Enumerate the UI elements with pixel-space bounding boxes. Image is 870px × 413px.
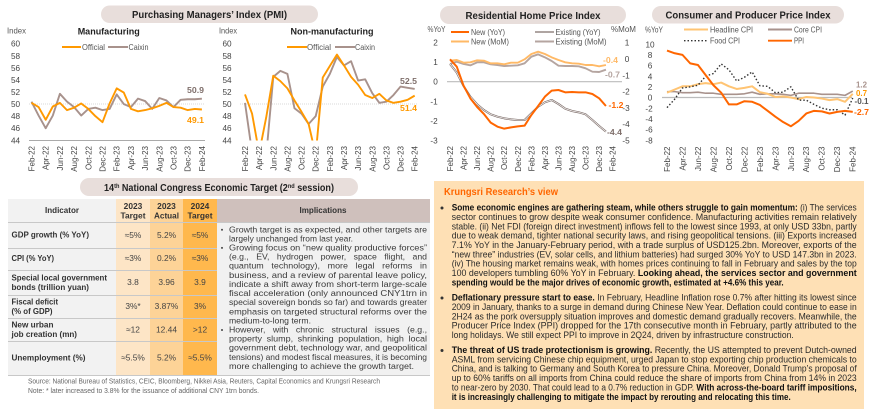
source note: Source: National Bureau of Statistics, CEIC, Bloomberg, Nikkei Asia, Reuters, Capital Economics and Krungsri Research — [28, 378, 380, 386]
chart: non-manufacturing PMI: 58 — [222, 52, 232, 61]
paragraph: US trade protectionism: to near-zero by 2030. That could lead to a 0.7% reduction in GDP. With across-the-board tariff impositions, — [452, 382, 857, 392]
chart: consumer and producer prices: Aug-22 — [709, 146, 718, 172]
chart: consumer and producer prices: Feb-23 — [756, 146, 765, 172]
chart: residential home prices: -3 — [622, 104, 630, 113]
chart: non-manufacturing PMI: Oct-23 — [382, 145, 391, 170]
table row: special local government bonds: 3.9 — [194, 277, 206, 287]
paragraph: deflationary pressure: long holidays. We still expect PPI to improve in 2Q24, driven by infrastructure construction. — [452, 330, 794, 340]
panel: Krungsri Research's view — [434, 181, 864, 409]
table row: special local government bonds: Special local government — [12, 272, 107, 282]
paragraph: economic engines: 7.1% YoY in the January-February period, with a trade surplus of USD125.2bn. Moreover, exports of the — [452, 240, 857, 250]
paragraph: deflationary pressure — [440, 292, 857, 340]
table row: special local government bonds — [12, 272, 206, 292]
chart: manufacturing PMI: Jun-23 — [141, 145, 150, 170]
chart: manufacturing PMI: Index — [7, 26, 26, 36]
chart: manufacturing PMI: 49.1 — [187, 115, 204, 125]
table cell: implications list: Growth target is as expected, and other targets are — [229, 224, 427, 234]
table row: unemployment: ≈5.5% — [188, 352, 212, 362]
chart: manufacturing PMI: Feb-22 — [28, 145, 36, 171]
chart: consumer and producer prices: Food CPI — [710, 37, 740, 46]
chart: consumer and producer prices — [645, 26, 869, 172]
chart: residential home prices: -1 — [430, 97, 438, 106]
chart: manufacturing PMI: 60 — [11, 40, 20, 49]
chart: non-manufacturing PMI: 54 — [222, 76, 232, 85]
source note: Note: * later increased to 3.8% for the issuance of additional CNY 1trn bonds. — [28, 388, 259, 395]
table row: GDP growth: 5.2% — [157, 230, 177, 240]
table header row: Indicator — [45, 205, 80, 215]
chart: residential home prices: Aug-22 — [487, 145, 496, 172]
table header row: Target — [188, 210, 213, 220]
chart: non-manufacturing PMI: Oct-22 — [298, 145, 307, 170]
chart: consumer and producer prices: Apr-22 — [678, 146, 688, 171]
table row: new urban job creation — [11, 320, 207, 339]
chart: non-manufacturing PMI: Jun-22 — [269, 145, 278, 170]
chart: residential home prices — [428, 25, 636, 172]
paragraph: US trade protectionism: The threat of US trade protectionism is growing. Recently, the US attempted to prevent Dutch-owned — [452, 345, 857, 355]
paragraph: US trade protectionism: it is increasingly challenging to mitigate the impact by rerouting and relocating this time. — [452, 392, 791, 402]
chart: residential home prices: -2 — [622, 88, 630, 96]
table row: unemployment — [12, 352, 212, 362]
chart: consumer and producer prices: -6 — [645, 126, 653, 135]
table row: GDP growth: GDP growth (% YoY) — [12, 230, 89, 240]
heading: National Congress economic target: 14 — [104, 182, 116, 194]
chart: residential home prices: %YoY — [428, 25, 446, 34]
table: economic targets — [8, 199, 430, 376]
chart: residential home prices: Jun-22 — [473, 145, 482, 170]
chart: manufacturing PMI: Apr-23 — [127, 145, 136, 170]
chart: consumer and producer prices: Dec-23 — [833, 146, 842, 172]
chart: consumer and producer prices: Dec-22 — [740, 146, 749, 172]
chart: residential home prices: New (YoY) — [471, 28, 505, 37]
table row: CPI: 0.2% — [157, 253, 177, 263]
table row: fiscal deficit: Fiscal deficit — [12, 296, 58, 306]
chart: consumer and producer prices: 0.7 — [856, 88, 867, 98]
chart: residential home prices: 0 — [625, 55, 630, 64]
chart: manufacturing PMI: 46 — [11, 124, 20, 133]
chart: consumer and producer prices: -8 — [645, 136, 653, 145]
table header row: 2023 — [124, 201, 143, 211]
chart: manufacturing PMI: 50 — [11, 100, 20, 109]
chart: residential home prices: -1 — [622, 71, 630, 80]
chart: manufacturing PMI: 58 — [11, 52, 20, 61]
paragraph: economic engines — [440, 202, 857, 288]
chart: residential home prices: Feb-23 — [527, 145, 536, 171]
chart: non-manufacturing PMI: 52 — [222, 88, 232, 97]
paragraph: US trade protectionism: China, and is talking to Germany and South Korea to pressure China. Moreover, Donald Trump’s proposal of — [452, 364, 857, 374]
chart: non-manufacturing PMI — [220, 28, 418, 172]
chart: consumer and producer prices: Headline CPI — [710, 26, 753, 34]
chart: residential home prices: -3 — [430, 136, 438, 145]
table row: special local government bonds: bonds (trillion yuan) — [12, 282, 89, 292]
table header row — [45, 201, 347, 220]
table row: unemployment: ≈5.5% — [121, 352, 145, 362]
table row: new urban job creation: ≈12 — [126, 324, 140, 334]
paragraph: US trade protectionism: ASML from servicing Chinese chip equipment, urged Japan to stop exporting chip production chemicals to — [452, 354, 857, 364]
chart: residential home prices: Dec-22 — [514, 145, 523, 172]
paragraph: economic engines: stable. (ii) Net FDI (foreign direct investment) inflows fell to the lowest since 1993, at only USD 33bn, partly — [452, 221, 857, 231]
table row: unemployment: 5.2% — [157, 352, 177, 362]
chart: non-manufacturing PMI: Dec-23 — [396, 145, 406, 172]
table header row: Implications — [300, 205, 347, 215]
chart: consumer and producer prices: -4 — [645, 115, 653, 124]
chart: non-manufacturing PMI: Dec-22 — [312, 145, 321, 172]
paragraph: economic engines: Some economic engines are gathering steam, while others struggle to gain momentum: (i) The services — [452, 202, 857, 212]
table row: CPI: CPI (% YoY) — [12, 253, 54, 263]
table cell: implications list: special sovereign bonds so far) and towards greater — [229, 297, 427, 307]
paragraph: US trade protectionism — [440, 345, 857, 402]
table cell: implications list: (e.g., EV, hydrogen power, space flight, and — [229, 252, 427, 262]
chart: non-manufacturing PMI: 46 — [222, 124, 232, 133]
paragraph: economic engines: sector continues to grow despite weak consumer confidence. Manufacturing activities remain relatively — [452, 212, 857, 222]
chart: residential home prices: Feb-24 — [609, 145, 618, 171]
chart: consumer and producer prices: Jun-22 — [694, 146, 703, 171]
paragraph: economic engines: 100 developers tumbling 60% YoY in February. Looking ahead, the services sector and government — [452, 268, 857, 278]
chart: manufacturing PMI: 50.9 — [187, 85, 204, 95]
chart: non-manufacturing PMI: 50 — [222, 100, 232, 109]
chart: manufacturing PMI: Feb-24 — [198, 145, 207, 171]
paragraph: economic engines: “new three” industries (EV, solar cells, and lithium batteries) had surged 30% YoY to USD 147.3bn in 2023. — [452, 249, 857, 259]
chart: consumer and producer prices: -2 — [645, 104, 653, 113]
chart: consumer and producer prices: Oct-22 — [725, 146, 734, 171]
chart: consumer and producer prices: -0.1 — [854, 96, 869, 106]
table cell: implications list: business, and a review of parental leave policy, — [229, 270, 427, 280]
chart: non-manufacturing PMI: Apr-22 — [255, 145, 264, 170]
chart: residential home prices: Oct-23 — [582, 145, 591, 170]
table row: new urban job creation: New urban — [12, 320, 54, 330]
chart: consumer and producer prices: -2.7 — [854, 107, 869, 117]
table cell: implications list: fiscal acceleration (only announced CNY1trn in — [229, 288, 427, 298]
heading: National Congress economic target: National Congress Economic Target (2 — [119, 182, 288, 194]
chart: residential home prices: 1 — [433, 58, 438, 67]
chart: manufacturing PMI: 56 — [11, 64, 20, 73]
chart: non-manufacturing PMI: Caixin — [355, 43, 375, 52]
table cell: implications list: tensions) and modest fiscal measures, it is becoming — [229, 352, 427, 362]
chart: manufacturing PMI: Dec-22 — [98, 145, 108, 172]
chart: manufacturing PMI: Aug-22 — [70, 145, 79, 172]
chart: consumer and producer prices: %YoY — [645, 26, 664, 34]
chart: consumer and producer prices: 0 — [648, 94, 653, 103]
table cell: implications list: quantum technology), more legal reforms in — [229, 261, 427, 271]
chart: residential home prices: Feb-22 — [446, 145, 455, 171]
chart: non-manufacturing PMI: 51.4 — [400, 103, 417, 113]
chart: residential home prices: Apr-22 — [460, 145, 469, 170]
chart: non-manufacturing PMI: Feb-24 — [411, 145, 420, 171]
chart: manufacturing PMI: Jun-22 — [56, 145, 65, 170]
chart: non-manufacturing PMI: Index — [219, 26, 237, 36]
chart: non-manufacturing PMI: Jun-23 — [354, 145, 363, 170]
table cell: implications list: largely unchanged from last year. — [229, 233, 353, 243]
paragraph: economic engines: spending would be the major drives of economic growth, estimated at +4.6% this year. — [452, 278, 784, 288]
chart: consumer and producer prices: Jun-23 — [787, 146, 796, 171]
heading: National Congress economic target: nd — [288, 183, 295, 190]
chart: residential home prices: Existing (YoY) — [556, 28, 601, 37]
chart: non-manufacturing PMI: Aug-22 — [283, 145, 292, 172]
table header row: 2023 — [157, 201, 176, 211]
paragraph: economic engines: (iv) The housing market remains weak, with homes prices continuing to fall in February and sales by the top — [452, 259, 857, 269]
table row: fiscal deficit: 3% — [194, 301, 207, 311]
paragraph: US trade protectionism: up to 60% tariffs on all imports from China could reduce the share of imports from China from 14% in 2023 — [452, 373, 857, 383]
chart: manufacturing PMI: Feb-23 — [113, 145, 122, 171]
chart: consumer and producer prices: 8 — [648, 51, 653, 60]
heading: Residential Home Price Index: Residential Home Price Index — [466, 10, 601, 22]
chart: residential home prices: Aug-23 — [568, 145, 577, 172]
chart: residential home prices: 1 — [625, 39, 630, 48]
table row: CPI: ≈3% — [192, 253, 209, 263]
chart: manufacturing PMI — [7, 26, 207, 172]
table row: new urban job creation: 12.44 — [156, 324, 177, 334]
paragraph: deflationary pressure: 2009 in January, thanks to a surge in demand during Chinese New Year. Deflation could continue to ease in — [452, 302, 857, 312]
chart: consumer and producer prices: 1.2 — [856, 80, 867, 90]
chart: non-manufacturing PMI: 44 — [222, 136, 232, 145]
chart: residential home prices: Existing (MoM) — [556, 38, 607, 46]
chart: residential home prices: 0 — [433, 78, 438, 87]
chart: non-manufacturing PMI: 52.5 — [400, 76, 417, 86]
chart: residential home prices: %MoM — [611, 25, 636, 34]
chart: manufacturing PMI: Oct-22 — [84, 145, 93, 170]
panel heading: Krungsri Research’s view — [444, 187, 558, 198]
chart: manufacturing PMI: Aug-23 — [155, 145, 164, 172]
table cell: implications list: However, with chronic structural issues (e.g., — [229, 324, 427, 334]
chart: manufacturing PMI: 52 — [11, 88, 20, 97]
heading: National Congress economic target — [80, 178, 358, 196]
chart: residential home prices: -4 — [622, 120, 630, 129]
chart: manufacturing PMI: Caixin — [128, 43, 148, 52]
chart: non-manufacturing PMI: Apr-23 — [340, 145, 349, 170]
chart: consumer and producer prices: Apr-23 — [771, 146, 780, 171]
table header row: 2024 — [191, 201, 210, 211]
table row: special local government bonds: 3.96 — [158, 277, 175, 287]
table cell: implications list: Growing focus on “new quality productive forces” — [229, 242, 427, 252]
heading: Consumer and Producer Price Index: Consumer and Producer Price Index — [666, 10, 831, 22]
paragraph: deflationary pressure: 2H24 as the pork oversupply situation improves and domestic demand gradually recovers. Meanwhile, the — [452, 311, 857, 321]
heading: National Congress economic target: session) — [295, 182, 334, 194]
chart: manufacturing PMI: 44 — [11, 136, 20, 145]
chart: non-manufacturing PMI: Official — [307, 43, 331, 52]
table cell: implications list: government debt, technology war, and geopolitical — [229, 343, 427, 353]
chart: consumer and producer prices: Oct-23 — [818, 146, 827, 171]
chart: non-manufacturing PMI: Feb-23 — [326, 145, 335, 171]
chart: consumer and producer prices: 6 — [648, 62, 653, 71]
paragraph: economic engines: due to weak demand, tighter national security laws, and rising geopolitical tensions. (iii) Exports increased — [452, 231, 857, 241]
table cell: implications list: more challenging to achieve the growth target. — [229, 361, 414, 371]
chart: manufacturing PMI: 54 — [11, 76, 20, 85]
chart: consumer and producer prices: 10 — [645, 40, 655, 49]
chart: non-manufacturing PMI: 48 — [222, 112, 232, 121]
chart: consumer and producer prices: Feb-22 — [663, 146, 672, 172]
chart: manufacturing PMI: Dec-23 — [184, 145, 193, 172]
heading: Purchasing Managers' Index: Purchasing Managers’ Index (PMI) — [132, 9, 287, 21]
table row: CPI: ≈3% — [125, 253, 142, 263]
chart: manufacturing PMI: Manufacturing — [78, 26, 140, 36]
chart: residential home prices: Apr-23 — [541, 145, 550, 170]
chart: consumer and producer prices: Feb-24 — [849, 146, 858, 172]
table row: CPI — [12, 253, 209, 263]
paragraph: deflationary pressure: Producer Price Index (PPI) dropped for the 17th consecutive month in February, partly attributed to the — [452, 321, 857, 331]
chart: manufacturing PMI: Official — [82, 43, 105, 52]
chart: consumer and producer prices: Core CPI — [794, 26, 822, 34]
table row: GDP growth: ≈5% — [125, 230, 142, 240]
chart: residential home prices: -2 — [430, 117, 438, 126]
chart: non-manufacturing PMI: 60 — [222, 40, 232, 49]
table row: fiscal deficit: 3.87% — [155, 301, 179, 311]
chart: consumer and producer prices: Aug-23 — [802, 146, 811, 172]
table row: new urban job creation: >12 — [193, 324, 207, 334]
table header row: Actual — [154, 210, 179, 220]
table row: GDP growth: ≈5% — [192, 230, 209, 240]
chart: manufacturing PMI: Oct-23 — [170, 145, 178, 170]
chart: residential home prices: 2 — [433, 39, 438, 48]
chart: residential home prices: -0.4 — [603, 55, 618, 65]
chart: residential home prices: -0.7 — [605, 70, 620, 80]
chart: consumer and producer prices: 2 — [648, 83, 653, 92]
chart: consumer and producer prices: PPI — [794, 37, 804, 46]
chart: residential home prices: Dec-23 — [595, 145, 604, 172]
table cell: implications list: medium-to-long term. — [229, 315, 311, 325]
heading: Purchasing Managers' Index — [101, 6, 318, 23]
table row: special local government bonds: 3.8 — [127, 277, 139, 287]
chart: residential home prices: -4.4 — [607, 127, 622, 137]
heading: Consumer and Producer Price Index — [652, 6, 844, 24]
chart: consumer and producer prices: 4 — [648, 72, 653, 81]
table row: fiscal deficit — [12, 296, 207, 316]
table cell: implications list: property slump, shrinking population, high local — [229, 334, 427, 344]
heading: Residential Home Price Index — [440, 6, 626, 24]
table row: unemployment: Unemployment (%) — [12, 352, 86, 362]
table row: GDP growth — [12, 230, 209, 240]
table row: new urban job creation: job creation (mn) — [11, 329, 77, 339]
chart: non-manufacturing PMI: Non-manufacturing — [290, 26, 374, 36]
chart: residential home prices: New (MoM) — [471, 38, 509, 46]
chart: non-manufacturing PMI: Aug-23 — [368, 145, 377, 172]
chart: manufacturing PMI: 48 — [11, 112, 20, 121]
chart: non-manufacturing PMI: 56 — [222, 64, 232, 73]
table header row: Target — [120, 210, 146, 220]
chart: non-manufacturing PMI: Feb-22 — [241, 145, 250, 171]
table row: fiscal deficit: 3%* — [125, 301, 141, 311]
chart: residential home prices: -1.2 — [608, 100, 624, 110]
paragraph: deflationary pressure: Deflationary pressure start to ease. In February, Headline Inflation rose 0.7% after hitting its lowest since — [452, 292, 857, 302]
table cell: implications list: emphasis on targeted structural reforms over the — [229, 306, 427, 316]
heading: National Congress economic target: th — [114, 183, 119, 190]
chart: residential home prices: Jun-23 — [554, 145, 564, 170]
source note — [28, 378, 380, 395]
table row: fiscal deficit: (% of GDP) — [12, 306, 53, 316]
table cell: implications list — [221, 224, 427, 371]
chart: manufacturing PMI: Apr-22 — [42, 145, 51, 170]
table cell: implications list: indicate a shift away from short-term large-scale — [229, 279, 427, 289]
chart: residential home prices: -5 — [622, 136, 630, 145]
chart: residential home prices: Oct-22 — [500, 145, 509, 170]
